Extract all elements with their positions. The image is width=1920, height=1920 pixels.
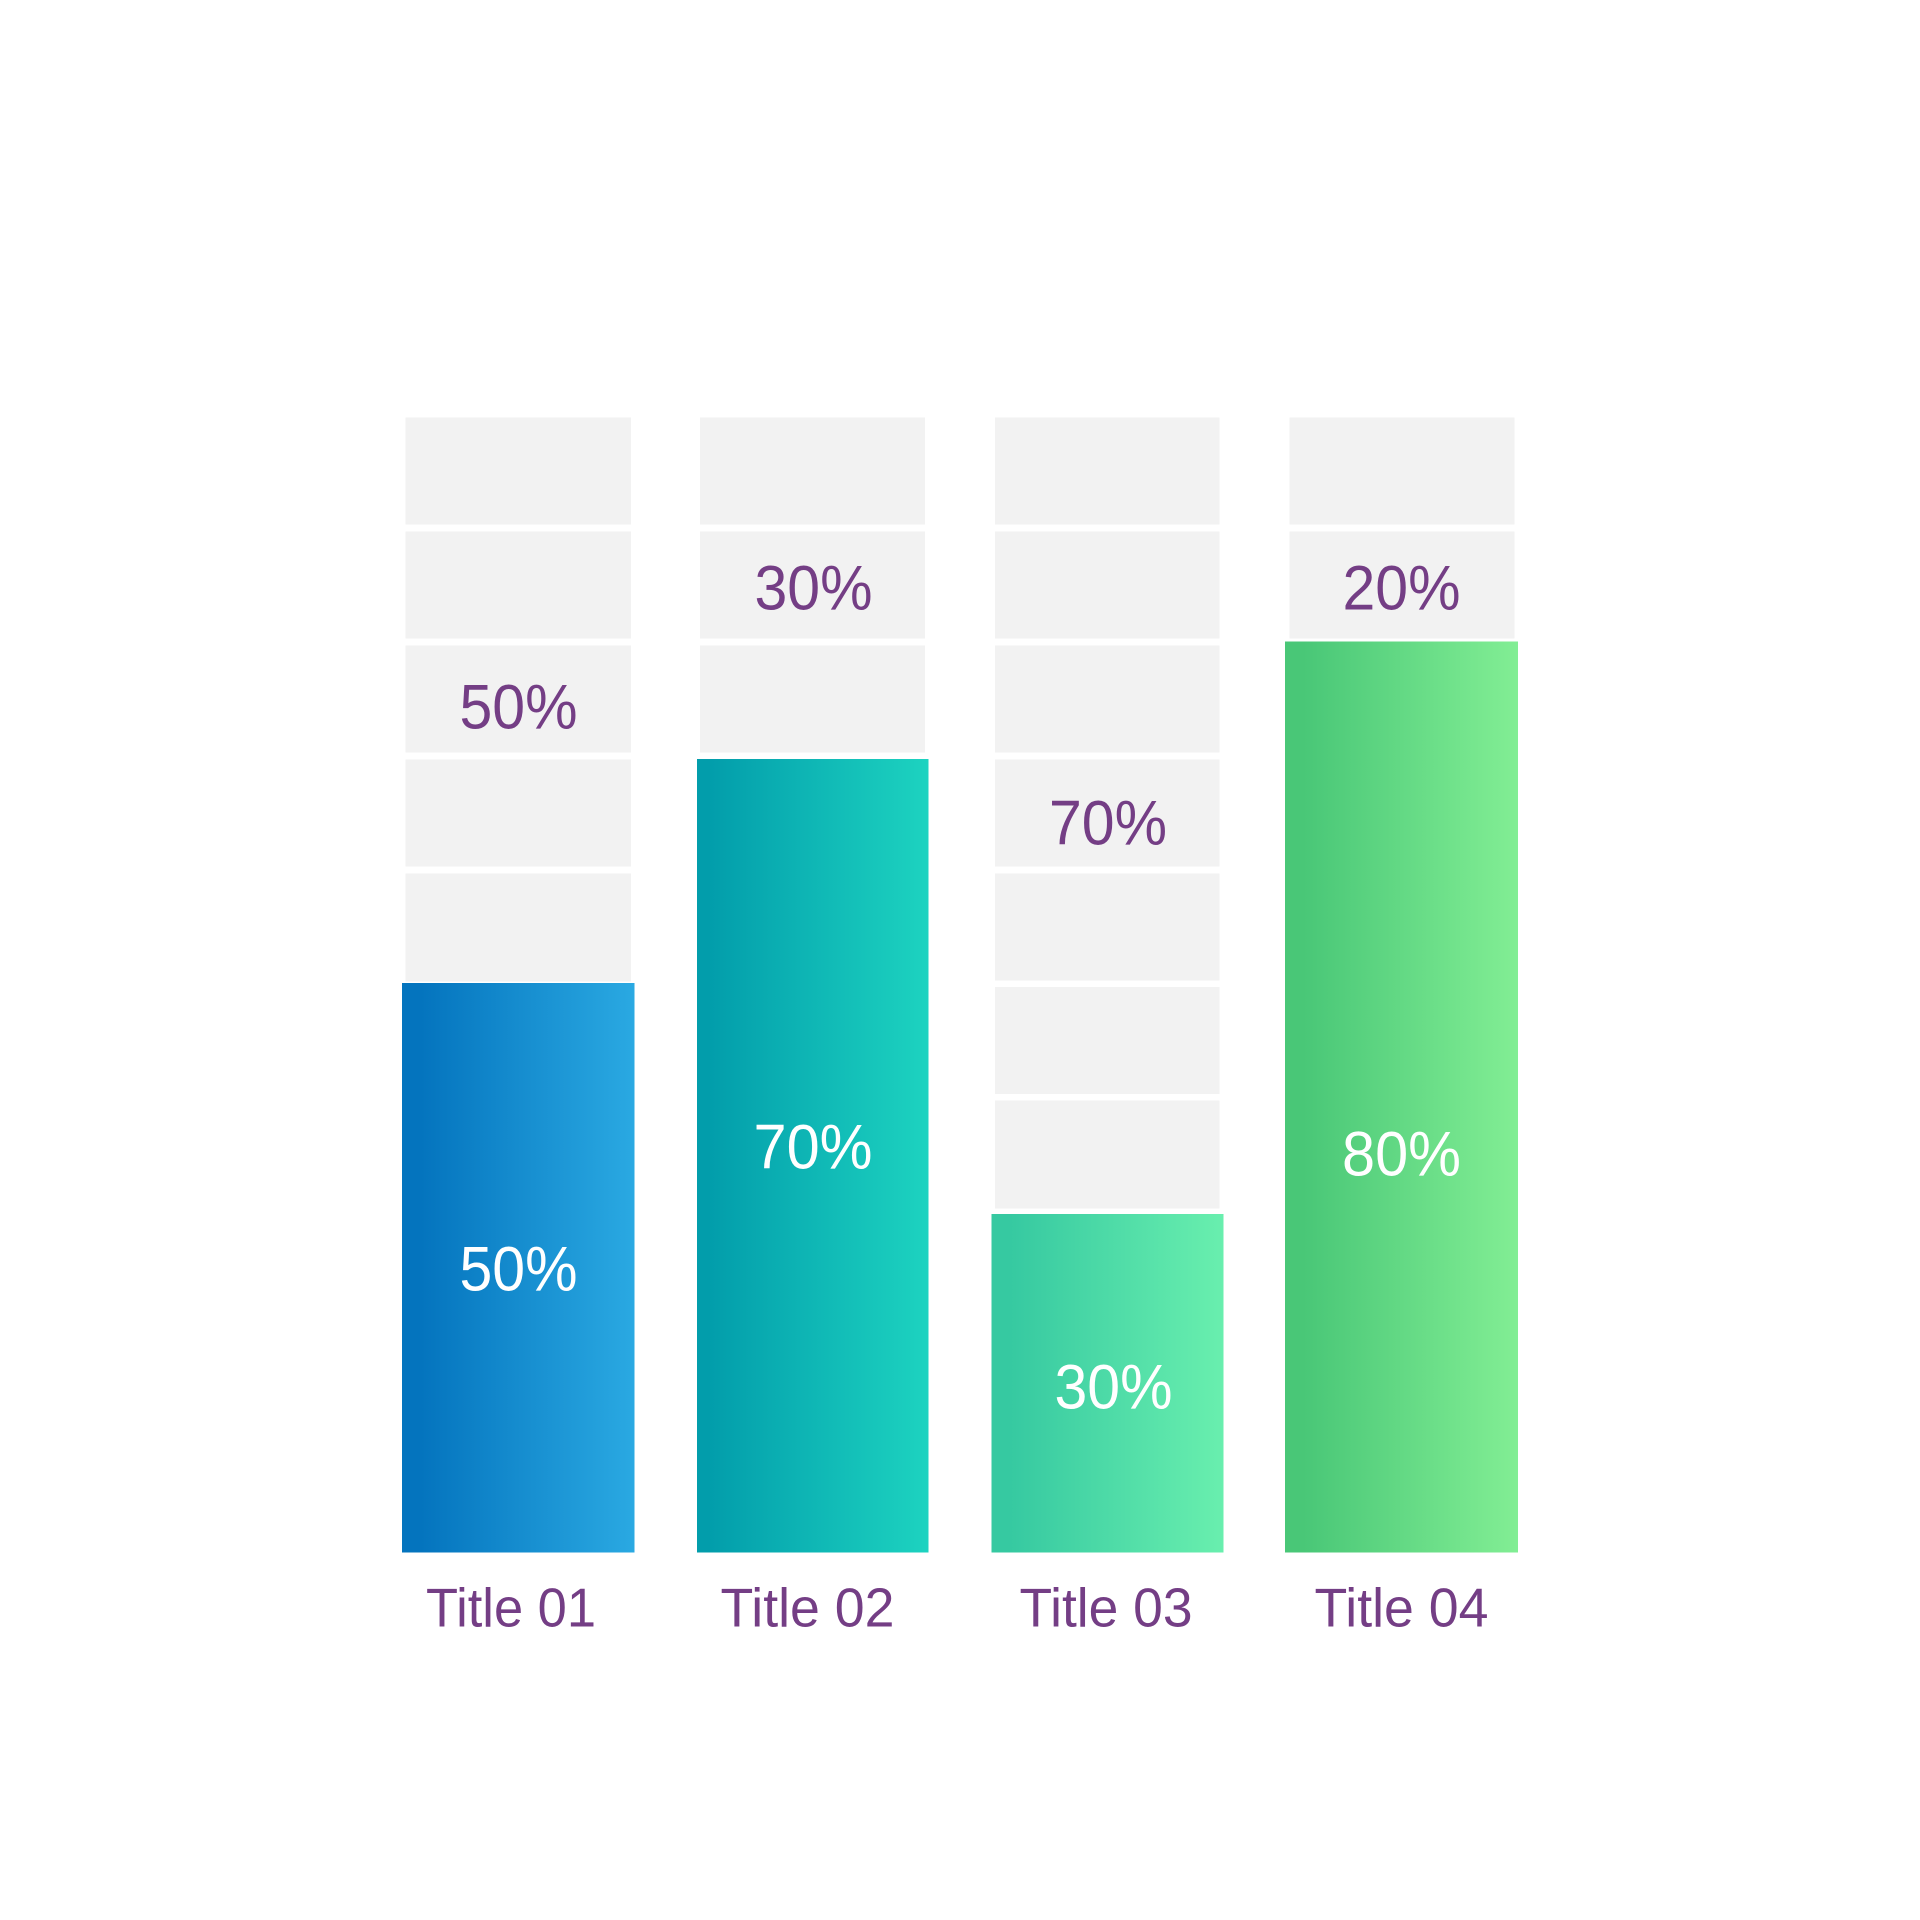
label Title 01: Title 01: [426, 1576, 596, 1638]
mint bar: [992, 1214, 1224, 1552]
column 4: Title 04: [1285, 418, 1518, 1638]
column 1: Title 01: [402, 418, 634, 1638]
bar value label 80%: 80%: [1342, 1120, 1461, 1190]
remaining value label 50%: 50%: [460, 672, 578, 742]
label Title 02: Title 02: [720, 1576, 894, 1638]
background segments column 4: [1290, 418, 1514, 638]
teal bar: [697, 759, 928, 1552]
remaining value label 70%: 70%: [1049, 788, 1167, 858]
green bar: [1285, 642, 1518, 1552]
background segments column 3: [995, 418, 1220, 1208]
bar value label 50%: 50%: [460, 1234, 578, 1304]
bar value label 70%: 70%: [754, 1112, 872, 1182]
blue bar: [402, 983, 634, 1552]
remaining value label 20%: 20%: [1342, 554, 1460, 624]
background segments column 1: [406, 418, 631, 982]
column 3: Title 03: [992, 418, 1224, 1638]
column 2: Title 02: [697, 418, 928, 1638]
label Title 03: Title 03: [1020, 1576, 1192, 1638]
bar value label 30%: 30%: [1054, 1352, 1172, 1422]
remaining value label 30%: 30%: [754, 554, 872, 624]
label Title 04: Title 04: [1314, 1576, 1488, 1638]
background segments column 2: [700, 418, 925, 752]
